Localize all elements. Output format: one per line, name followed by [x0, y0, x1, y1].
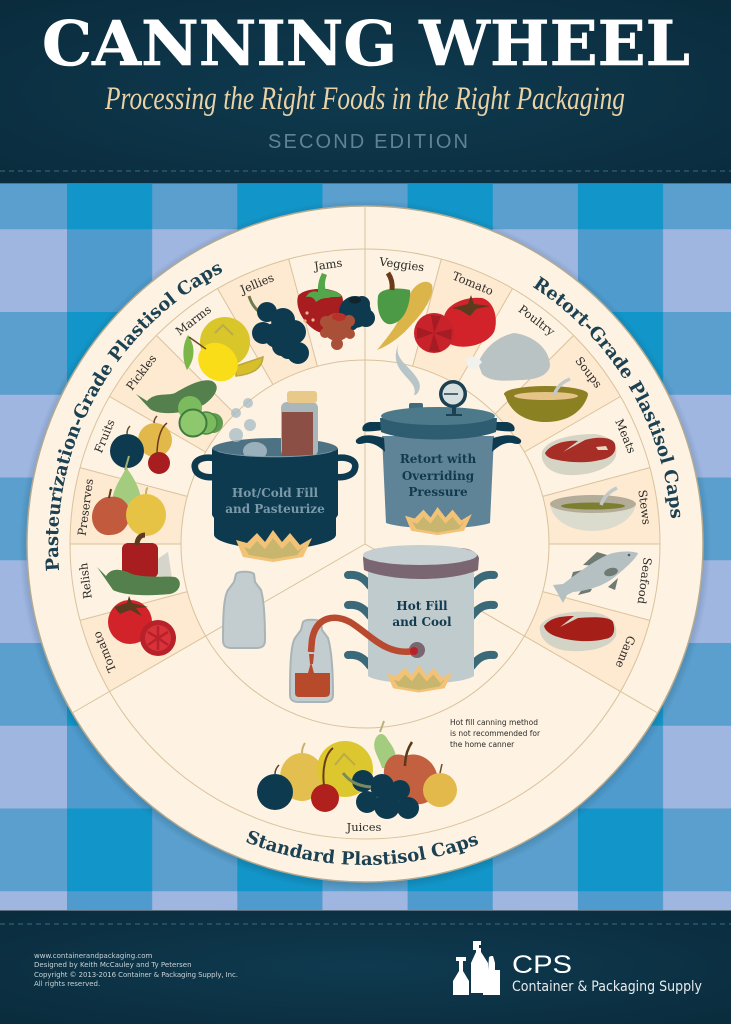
icon: veggies	[377, 273, 432, 350]
icon: meat steak	[542, 434, 616, 475]
note: is not recommended for	[450, 729, 541, 738]
icon: juice fruits	[257, 721, 457, 819]
segment labels: Seafood	[634, 557, 655, 606]
segment labels: Pickles	[123, 352, 159, 393]
icon: game meat	[540, 612, 616, 651]
pot: hot/cold fill	[195, 391, 355, 562]
pot: retort: Retort with	[400, 452, 476, 466]
footer credits	[34, 952, 238, 988]
segment labels: Stews	[635, 489, 654, 526]
segment labels: Poultry	[516, 302, 558, 339]
footer credits: All rights reserved.	[34, 980, 100, 988]
segment labels: Juices	[346, 820, 382, 834]
pot: hot fill: and Cool	[392, 615, 452, 629]
segment labels: Meats	[612, 417, 639, 455]
icon: jam berries	[297, 273, 375, 350]
icon: flame	[387, 665, 452, 693]
segment labels: Veggies	[378, 254, 425, 274]
icon: tomato right	[414, 295, 496, 353]
icon: fish	[553, 552, 638, 603]
segment labels	[75, 254, 655, 834]
wheel	[19, 200, 711, 892]
icon: jar in pot	[281, 391, 318, 456]
gingham tablecloth background	[0, 184, 731, 911]
footer credits: Designed by Keith McCauley and Ty Petersen	[34, 961, 192, 969]
icon: marmalade citrus	[183, 317, 263, 389]
icon: tomato left	[108, 596, 176, 656]
segment labels: Tomato	[90, 629, 119, 674]
segment labels: Soups	[572, 354, 605, 391]
segment labels: Marms	[173, 302, 214, 338]
segment labels: Fruits	[91, 417, 118, 455]
footer band	[0, 910, 731, 1024]
band heading: standard: Standard Plastisol Caps	[246, 830, 478, 866]
segment labels: Jellies	[237, 270, 276, 297]
footer credits: Copyright © 2013-2016 Container & Packaging Supply, Inc.	[34, 971, 238, 979]
pot: retort: Overriding	[402, 469, 475, 483]
segment labels: Relish	[76, 561, 95, 600]
segment labels: Jams	[312, 256, 343, 273]
logo: CPS	[512, 951, 572, 979]
pot: retort	[356, 343, 521, 535]
food ring alternating sectors	[126, 304, 604, 784]
icon: flame	[405, 507, 472, 535]
note: Hot fill canning method	[450, 718, 538, 727]
note: the home canner	[450, 740, 515, 749]
title: CANNING WHEEL	[42, 7, 690, 80]
edition label: SECOND EDITION	[268, 131, 468, 153]
pot: hot fill: Hot Fill	[396, 599, 448, 613]
segment labels: Preserves	[75, 478, 96, 537]
icon: stew bowl	[550, 488, 636, 531]
segment labels: Game	[613, 634, 638, 670]
icon: empty jar	[223, 572, 265, 648]
pot: hot/cold fill: and Pasteurize	[225, 502, 325, 516]
icon: transfer tube	[309, 618, 425, 664]
icon: filling jar	[290, 620, 333, 702]
pot: hot fill	[223, 545, 494, 702]
logo	[453, 941, 702, 995]
icon: relish	[97, 535, 180, 595]
icon: pickles	[136, 380, 223, 436]
band heading: pasteurization: Pasteurization-Grade Plastisol Caps	[46, 264, 222, 571]
icon: jelly grapes	[249, 296, 309, 364]
icon: soup bowl	[504, 379, 588, 422]
note	[450, 718, 541, 749]
segment labels: Tomato	[450, 269, 496, 298]
pot handles	[348, 575, 494, 666]
band heading: retort: Retort-Grade Plastisol Caps	[532, 276, 680, 518]
steam bubbles	[229, 398, 256, 442]
icon: bottles	[453, 941, 500, 995]
header band	[0, 0, 731, 184]
logo: Container & Packaging Supply	[512, 979, 702, 995]
icon: flame	[236, 530, 312, 562]
icon: pressure gauge	[439, 380, 467, 416]
pot: retort: Pressure	[408, 485, 468, 499]
icon: fruits	[110, 416, 172, 474]
footer credits: www.containerandpackaging.com	[34, 952, 153, 960]
icon: steam	[396, 343, 420, 395]
pot: hot/cold fill: Hot/Cold Fill	[232, 486, 319, 500]
icon: preserves fruit	[92, 456, 166, 536]
icon: poultry	[466, 333, 550, 381]
